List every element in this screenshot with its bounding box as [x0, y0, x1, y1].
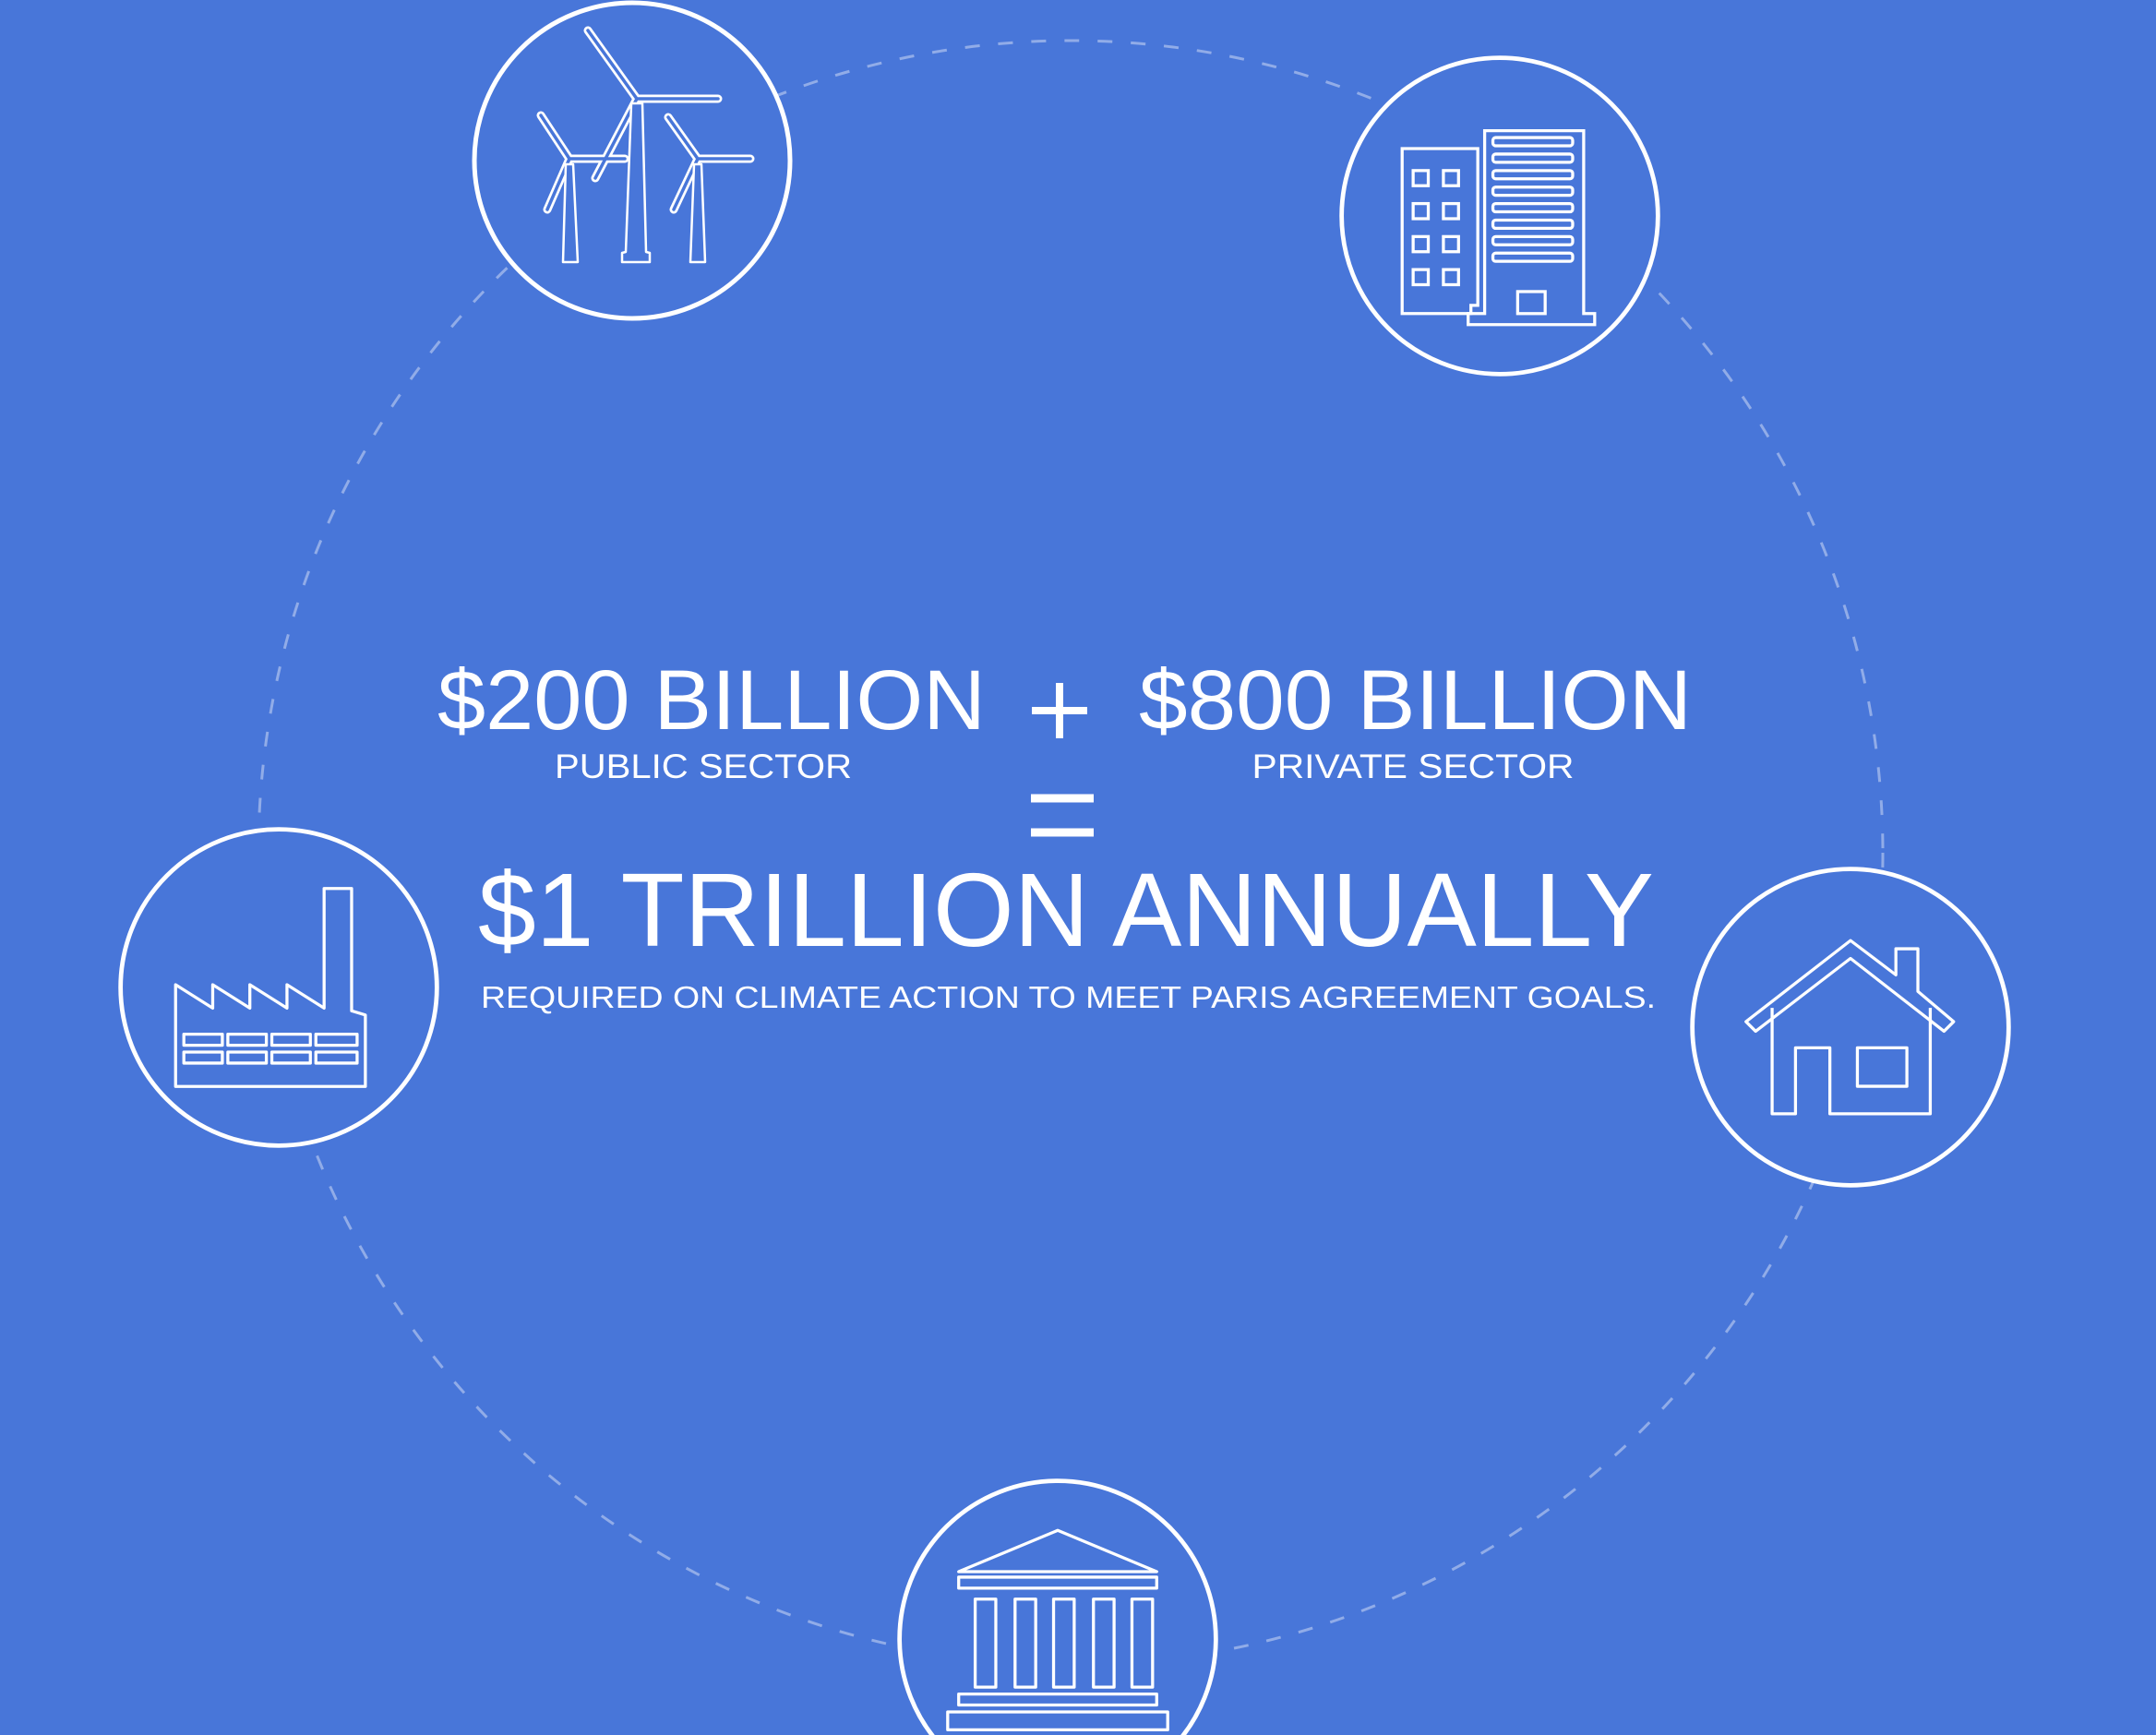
- plus sign: [1032, 683, 1087, 738]
- headline: public sector: $200 BILLION: [437, 653, 986, 748]
- equals sign: [1031, 798, 1094, 832]
- total: $1 TRILLION ANNUALLY: [478, 852, 1654, 968]
- headline: private sector: $800 BILLION: [1139, 653, 1692, 748]
- icon: house: [1693, 869, 2008, 1185]
- headline: private sector: [1139, 653, 1692, 785]
- subtitle: REQUIRED ON CLIMATE ACTION TO MEET PARIS AGREEMENT GOALS.: [481, 980, 1656, 1014]
- icon: wind turbines: [474, 3, 790, 318]
- icon: bank: [900, 1481, 1216, 1735]
- icon: factory: [121, 830, 437, 1145]
- headline: public sector: PUBLIC SECTOR: [555, 748, 852, 785]
- headline: private sector: PRIVATE SECTOR: [1252, 748, 1575, 785]
- icon: office buildings: [1342, 58, 1658, 374]
